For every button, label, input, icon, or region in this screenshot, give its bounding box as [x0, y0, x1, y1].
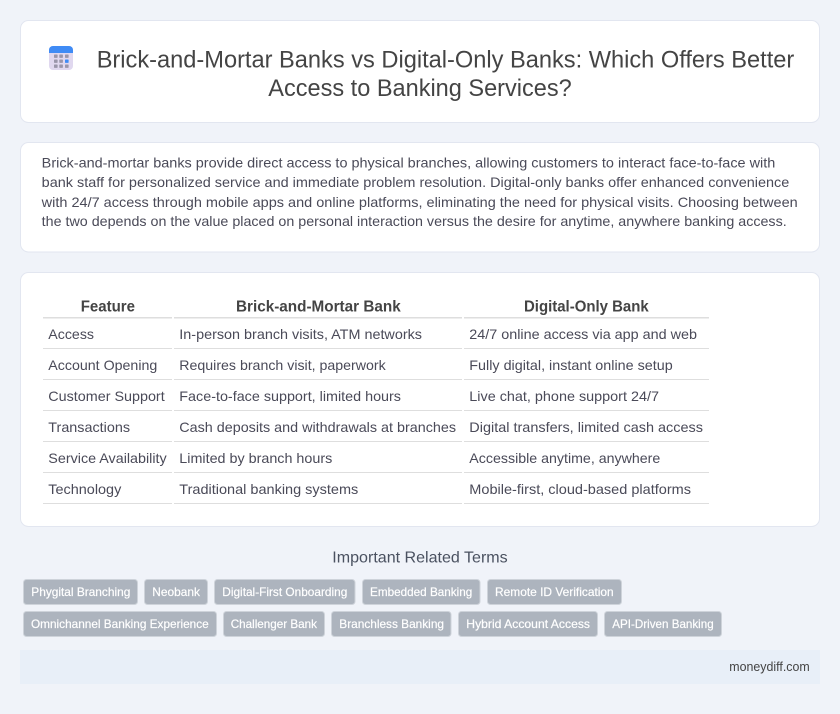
- table row: Technology: Traditional banking systems: [179, 481, 358, 497]
- chip: Embedded Banking: [362, 580, 480, 604]
- panel: comparison table: [20, 272, 820, 526]
- table row: Customer Support: [43, 388, 709, 411]
- text block: summary: with 24/7 access through mobile apps and online platforms, eliminating the need for physical visits. Choosing between: [41, 194, 798, 210]
- table header: Feature: [81, 299, 135, 316]
- table row: Access: Access: [48, 326, 94, 342]
- text block: summary: the two depends on the value placed on personal interaction versus the desire for anytime, anywhere banking access.: [42, 213, 787, 229]
- footer: [20, 650, 820, 684]
- table row: Customer Support: Customer Support: [48, 388, 165, 404]
- panel: related term chips: [24, 580, 722, 636]
- text block: summary: [41, 155, 798, 229]
- title: Access to Banking Services?: [268, 75, 572, 102]
- table row: Service Availability: Service Availability: [48, 450, 167, 466]
- chip: Challenger Bank: [224, 612, 324, 636]
- chip: Neobank: Neobank: [152, 585, 201, 599]
- table row: Service Availability: Limited by branch hours: [179, 450, 332, 466]
- table row: Access: [43, 326, 709, 349]
- chip: Challenger Bank: Challenger Bank: [231, 617, 318, 631]
- table row: Transactions: Transactions: [48, 419, 130, 435]
- chip: API-Driven Banking: [604, 612, 722, 636]
- table row: Account Opening: [43, 357, 709, 380]
- panel: summary paragraph: [20, 142, 820, 252]
- footer: moneydiff.com: [729, 660, 810, 674]
- table header: [43, 299, 709, 318]
- table header: Brick-and-Mortar Bank: [236, 299, 401, 316]
- text block: summary: Brick-and-mortar banks provide direct access to physical branches, allowing customers to interact face-to-face with: [42, 155, 775, 171]
- chip: Remote ID Verification: [488, 580, 622, 604]
- table row: Technology: Mobile-first, cloud-based platforms: [469, 481, 691, 497]
- table row: Service Availability: [43, 450, 709, 473]
- table row: Transactions: [43, 419, 709, 442]
- chip: Branchless Banking: Branchless Banking: [339, 617, 444, 631]
- text block: summary: bank staff for personalized service and immediate problem resolution. Digital-only banks offer enhanced convenience: [42, 174, 790, 190]
- chip: Branchless Banking: [332, 612, 451, 636]
- chip: Digital-First Onboarding: [214, 580, 355, 604]
- title: [97, 46, 794, 102]
- table row: Access: In-person branch visits, ATM networks: [179, 326, 422, 342]
- table row: Account Opening: Fully digital, instant online setup: [469, 357, 673, 373]
- table row: Customer Support: Face-to-face support, limited hours: [179, 388, 401, 404]
- chip: Omnichannel Banking Experience: [24, 612, 216, 636]
- chip: API-Driven Banking: API-Driven Banking: [612, 617, 714, 631]
- table row: Customer Support: Live chat, phone support 24/7: [469, 388, 659, 404]
- chip: Embedded Banking: Embedded Banking: [370, 585, 472, 599]
- table row: Account Opening: Requires branch visit, paperwork: [179, 357, 387, 373]
- heading: related terms: Important Related Terms: [332, 549, 508, 566]
- chip: Remote ID Verification: Remote ID Verification: [495, 585, 614, 599]
- table row: Service Availability: Accessible anytime, anywhere: [469, 450, 661, 466]
- chip: Digital-First Onboarding: Digital-First Onboarding: [222, 585, 347, 599]
- table row: Access: 24/7 online access via app and web: [469, 326, 697, 342]
- chip: Omnichannel Banking Experience: Omnichannel Banking Experience: [31, 617, 209, 631]
- chip: Phygital Branching: [24, 580, 138, 604]
- chip: Phygital Branching: Phygital Branching: [31, 585, 130, 599]
- table row: Technology: [43, 481, 709, 504]
- table row: Account Opening: Account Opening: [48, 357, 157, 373]
- chip: Hybrid Account Access: Hybrid Account Access: [466, 617, 590, 631]
- chip: Neobank: [144, 580, 208, 604]
- icon: calendar: [49, 46, 73, 70]
- table row: Transactions: Digital transfers, limited cash access: [469, 419, 703, 435]
- title: Brick-and-Mortar Banks vs Digital-Only Banks: Which Offers Better: [97, 46, 794, 73]
- table row: Transactions: Cash deposits and withdrawals at branches: [179, 419, 456, 435]
- chip: Hybrid Account Access: [458, 612, 598, 636]
- panel: title card: [20, 20, 820, 122]
- table row: Technology: Technology: [48, 481, 121, 497]
- table header: Digital-Only Bank: [524, 299, 649, 316]
